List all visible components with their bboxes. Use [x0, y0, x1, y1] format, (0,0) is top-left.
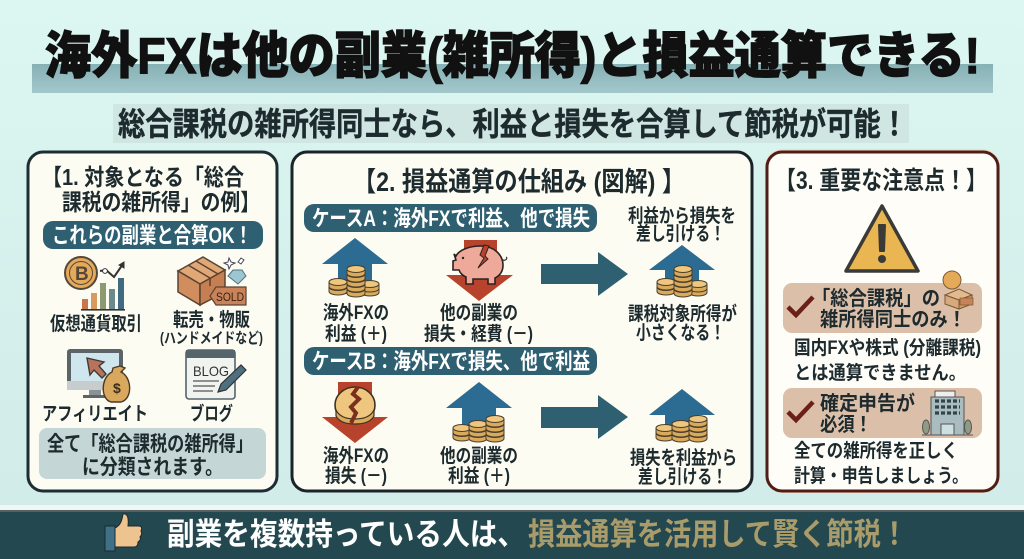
label: FX loss: 損失 (－): [325, 465, 387, 487]
note: all categorized: [39, 428, 266, 479]
callout: comprehensive taxation only: 雑所得同士のみ！: [820, 308, 966, 331]
label: other job profit: [440, 445, 518, 487]
arrow: overseas FX profit with coins: [322, 238, 388, 297]
text: subtract loss from profit B: 差し引ける！: [638, 466, 727, 488]
label: resale: (ハンドメイドなど): [160, 330, 263, 347]
callout: tax return required: 確定申告が: [820, 391, 915, 415]
subtitle: 総合課税の雑所得同士なら、利益と損失を合算して節税が可能！: [118, 106, 908, 142]
icon: coin and box: [943, 271, 973, 309]
text: subtract loss from profit: 利益から損失を: [628, 205, 736, 227]
label: affiliate: アフィリエイト: [42, 404, 148, 425]
text: calculate and declare correctly: 計算・申告しましょう。: [794, 464, 968, 487]
text: subtract loss from profit: 差し引ける！: [636, 223, 725, 245]
footer message: 損益通算を活用して賢く節税！: [528, 517, 908, 552]
note: all categorized: 全て「総合課税の雑所得」: [47, 433, 253, 456]
arrow: reduced taxable income with coins: [649, 245, 715, 297]
text: subtract loss from profit B: 損失を利益から: [630, 447, 737, 469]
text: calculate and declare correctly: [794, 440, 968, 487]
callout: comprehensive taxation only: [783, 271, 982, 333]
icon: thumbs up: [105, 514, 142, 551]
label: FX profit: 利益 (＋): [325, 323, 387, 345]
panel: important notes: [765, 149, 1000, 493]
banner: case B: ケースB：海外FXで損失、他で利益: [312, 349, 590, 374]
label: FX profit: [323, 302, 389, 345]
icon: parcel and sold tag: SOLD: [216, 290, 244, 304]
footer message: [167, 517, 908, 552]
icon: crypto trading: [65, 257, 125, 311]
panel 2 heading: 【2. 損益通算の仕組み (図解) 】: [353, 167, 685, 197]
panel: mechanism diagram: [292, 152, 752, 491]
arrow: case A result: [541, 252, 628, 296]
label: FX loss: [323, 445, 389, 487]
note: all categorized: に分類されます。: [82, 456, 223, 479]
callout: tax return required: 必須！: [820, 413, 872, 436]
label: resale: 転売・物販: [173, 309, 250, 331]
footer bar: [0, 505, 1024, 559]
text: not combinable with domestic FX: とは通算できません。: [794, 361, 966, 384]
text: taxable income shrinks: 小さくなる！: [636, 322, 725, 344]
arrow: overseas FX loss with broken coin: [322, 382, 388, 443]
text: taxable income shrinks: 課税対象所得が: [628, 302, 737, 325]
icon: tax office building: [922, 391, 973, 435]
text: not combinable with domestic FX: [794, 337, 981, 384]
label: other job loss: 他の副業の: [440, 302, 518, 324]
panel: examples of miscellaneous income: [28, 152, 277, 491]
label: other job profit: 利益 (＋): [448, 465, 510, 487]
text: taxable income shrinks: [628, 302, 737, 344]
label: other job loss: 損失・経費 (－): [424, 323, 533, 345]
label: resale: [160, 309, 263, 347]
icon: warning triangle: [846, 206, 918, 271]
panel 1 heading: [42, 164, 260, 215]
arrow: other side job loss with broken piggy bank: [446, 240, 513, 301]
text: subtract loss from profit: [628, 205, 736, 245]
label: FX loss: 海外FXの: [323, 445, 389, 467]
label: crypto: 仮想通貨取引: [50, 312, 142, 335]
text: not combinable with domestic FX: 国内FXや株式 (分離課税): [794, 337, 981, 359]
icon: crypto trading: B: [75, 264, 89, 285]
footer message: 副業を複数持っている人は、: [167, 517, 525, 552]
icon: blog page with pen: BLOG: [193, 363, 229, 379]
arrow: case B reduced income with coins: [649, 389, 715, 442]
callout: comprehensive taxation only: 「総合課税」の: [812, 287, 940, 310]
label: FX profit: 海外FXの: [323, 302, 389, 324]
icon: affiliate monitor: $: [113, 380, 121, 396]
panel 1 heading: 課税の雑所得」の例】: [62, 189, 260, 215]
banner: case A: ケースA：海外FXで利益、他で損失: [312, 206, 590, 231]
arrow: other job profit with coins: [446, 382, 512, 442]
title band: [32, 64, 993, 93]
panel 1 heading: 【1. 対象となる「総合: [42, 164, 244, 190]
icon: parcel and sold tag: [178, 257, 246, 305]
text: subtract loss from profit B: [630, 447, 737, 488]
panel 3 heading: 【3. 重要な注意点！】: [775, 167, 987, 195]
callout: tax return required: [783, 388, 982, 438]
label: blog: ブログ: [190, 402, 233, 425]
arrow: case B result: [541, 395, 628, 439]
banner: OK to combine: これらの副業と合算OK！: [52, 223, 252, 248]
icon: blog page with pen: [186, 350, 246, 399]
text: calculate and declare correctly: 全ての雑所得を正しく: [794, 440, 958, 462]
icon: affiliate monitor: [67, 349, 130, 402]
label: other job profit: 他の副業の: [440, 445, 518, 467]
label: other job loss: [424, 302, 533, 345]
